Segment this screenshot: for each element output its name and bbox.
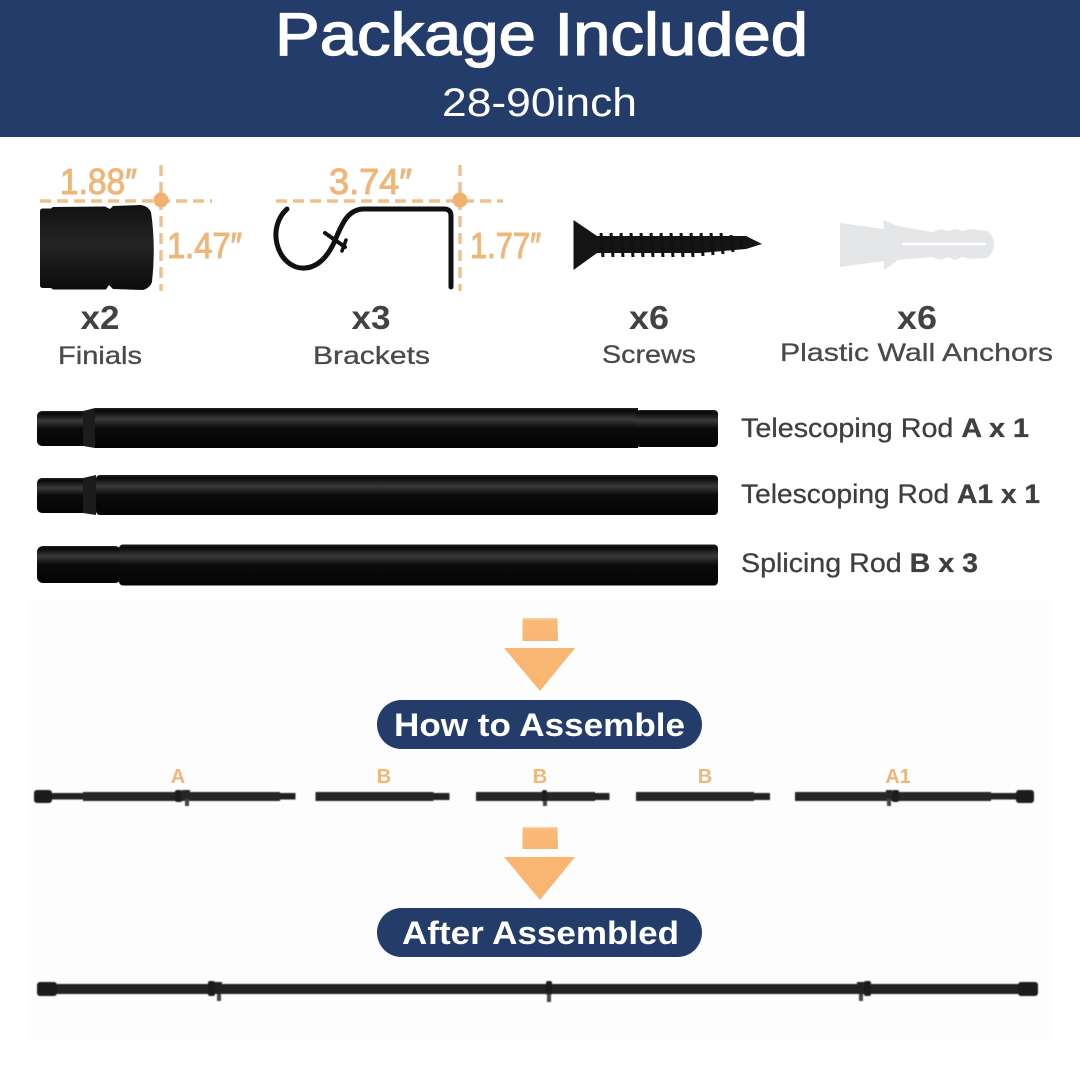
label: Telescoping Rod A1 x 1 <box>741 479 1040 509</box>
section B: B <box>698 766 712 788</box>
icon: wall anchor <box>840 220 994 270</box>
name: Finials <box>58 342 142 370</box>
name: Plastic Wall Anchors <box>780 339 1053 367</box>
arrow: down to assembly <box>504 618 575 691</box>
label: Splicing Rod B x 3 <box>741 548 978 578</box>
header banner <box>0 0 1080 137</box>
section B with bracket: B <box>533 766 547 788</box>
section B with bracket <box>476 766 610 806</box>
splicing rod B <box>37 544 978 586</box>
badge: how to assemble <box>377 700 702 749</box>
dimension lines <box>276 165 503 291</box>
section A: A <box>171 766 185 788</box>
section A1 <box>795 766 1034 806</box>
panel: screws <box>574 220 762 369</box>
height label: 1.47″ <box>167 225 242 266</box>
section A1: A1 <box>885 766 911 788</box>
quantity: x2 <box>80 299 120 336</box>
quantity: x6 <box>629 299 669 336</box>
telescoping rod A1 <box>37 475 1040 515</box>
icon: bracket <box>276 209 451 287</box>
width label: 1.88″ <box>60 161 137 202</box>
dimension lines <box>40 165 212 291</box>
quantity: x6 <box>897 299 937 336</box>
section B <box>636 766 770 801</box>
badge: how to assemble: How to Assemble <box>394 707 685 743</box>
panel: finials <box>40 161 242 370</box>
section A <box>34 766 296 806</box>
section B <box>316 766 450 801</box>
title: Package Included <box>275 1 808 68</box>
height label: 1.77″ <box>470 225 541 266</box>
section B: B <box>377 766 391 788</box>
badge: after assembled <box>377 908 702 957</box>
telescoping rod A <box>37 408 1029 448</box>
icon: finial <box>40 205 154 290</box>
panel: plastic wall anchors <box>780 220 1053 367</box>
exploded rod sections <box>34 766 1034 806</box>
label: Telescoping Rod A x 1 <box>741 413 1029 443</box>
badge: after assembled: After Assembled <box>402 915 679 951</box>
subtitle: 28-90inch <box>442 81 637 125</box>
assembled rod <box>37 981 1038 1002</box>
arrow: down to assembled <box>504 827 575 900</box>
quantity: x3 <box>352 299 390 336</box>
panel: brackets <box>276 161 541 370</box>
icon: screw <box>574 220 762 270</box>
name: Brackets <box>313 342 430 370</box>
name: Screws <box>602 341 696 369</box>
width label: 3.74″ <box>329 161 412 202</box>
